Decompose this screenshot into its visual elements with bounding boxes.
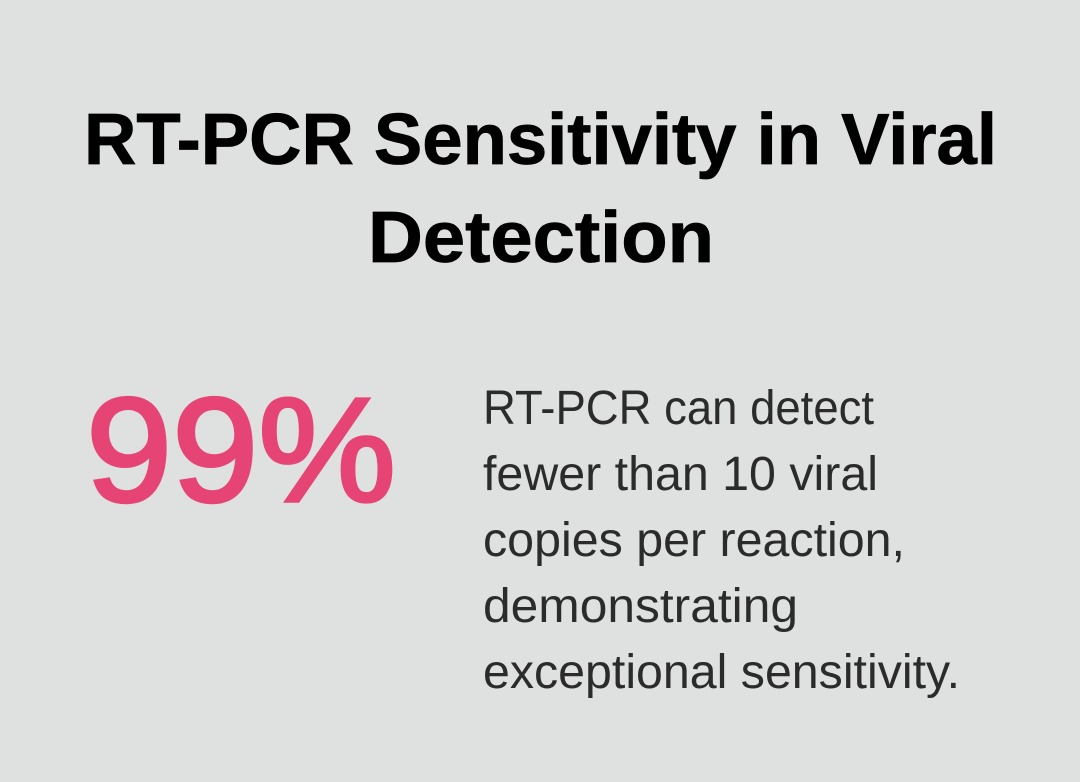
description text: exceptional sensitivity. — [483, 646, 960, 699]
description text — [483, 382, 960, 699]
description text: fewer than 10 viral — [483, 448, 878, 501]
title — [84, 100, 997, 278]
title: Detection — [368, 198, 714, 278]
title: RT-PCR Sensitivity in Viral — [84, 100, 997, 180]
description text: RT-PCR can detect — [483, 382, 874, 435]
description text: demonstrating — [483, 580, 798, 633]
description text: copies per reaction, — [483, 514, 905, 567]
statistic: 99%: 99% — [86, 368, 396, 533]
